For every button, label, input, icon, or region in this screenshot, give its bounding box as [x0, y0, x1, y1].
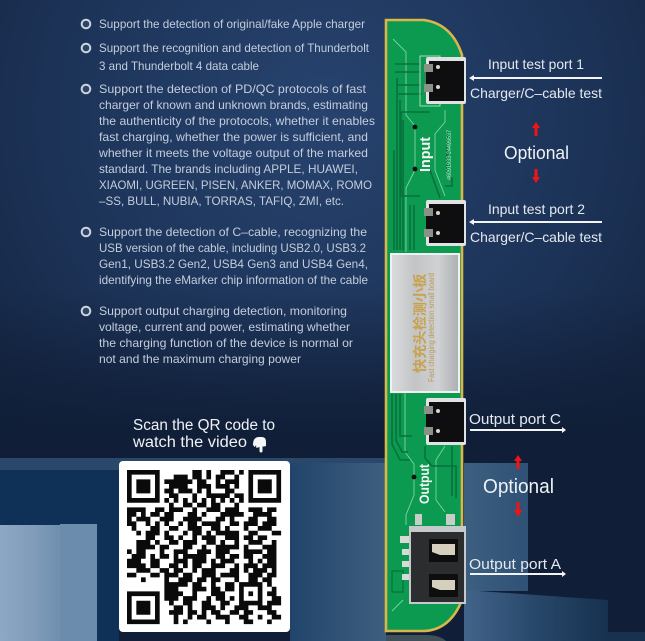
callout: input test port 2 [469, 201, 602, 245]
callout: input test port 2: Input test port 2 [488, 201, 585, 217]
feature: output charging detection: not and the maximum charging power [99, 352, 301, 366]
feature: Thunderbolt recognition: 3 and Thunderbolt 4 data cable [99, 59, 259, 73]
feature: PD/QC protocols: Support the detection of PD/QC protocols of fast [99, 82, 367, 96]
feature: PD/QC protocols: –SS, BULL, NUBIA, TORRAS, TAFIQ, ZMI, etc. [99, 194, 344, 208]
feature: PD/QC protocols: standard. The brands including APPLE, HUAWEI, [99, 162, 358, 176]
feature: PD/QC protocols [82, 82, 375, 208]
icon: pointing hand [253, 437, 266, 452]
feature: output charging detection [82, 304, 353, 366]
label: Output: Output [417, 464, 432, 504]
feature: output charging detection: the charging function of the device is normal or [99, 336, 353, 350]
feature: charger detection: Support the detection of original/fake Apple charger [99, 17, 365, 31]
PCB body with gold edge [386, 20, 462, 631]
USB-C port: output C [424, 398, 466, 445]
QR heading: Scan the QR code to [133, 417, 275, 434]
callout: output port A: Output port A [469, 557, 561, 573]
feature: Thunderbolt recognition [82, 41, 370, 73]
feature: PD/QC protocols: fast charging, whether the power is sufficient, and [99, 130, 368, 144]
feature: Thunderbolt recognition: Support the recognition and detection of Thunderbolt [99, 41, 370, 55]
metal shield with printed label: Fast charging detection small board [426, 273, 436, 382]
USB-C port: input 1 [420, 56, 466, 106]
feature: C-cable detection: identifying the eMarker chip information of the cable [99, 273, 368, 287]
arrow: red down [514, 502, 522, 517]
arrow: into port 1 [469, 75, 602, 81]
arrow: out of port C [470, 427, 566, 433]
USB-C port: input 2 [424, 200, 466, 246]
callout: input test port 2: Charger/C–cable test [470, 229, 602, 245]
feature: C-cable detection [82, 225, 368, 287]
QR heading [132, 417, 275, 452]
traces [392, 39, 456, 611]
feature: C-cable detection: Support the detection of C–cable, recognizing the [99, 225, 367, 239]
feature: C-cable detection: Gen1, USB3.2 Gen2, USB4 Gen3 and USB4 Gen4, [99, 257, 368, 271]
arrow: red up [514, 455, 522, 469]
feature: PD/QC protocols: whether it meets the voltage output of the marked [98, 146, 368, 160]
callout: output port C: Output port C [469, 412, 561, 428]
circuit board [386, 20, 466, 641]
feature: PD/QC protocols: the authenticity of the protocols, whether it enables [99, 114, 375, 128]
feature list [82, 17, 375, 366]
USB-A port [400, 514, 466, 604]
arrow: into port 2 [469, 219, 602, 225]
arrow: out of port A [470, 571, 566, 577]
feature: output charging detection: voltage, current and power, estimating whether [99, 320, 350, 334]
callout: output optional: Optional [483, 476, 554, 498]
callout: input test port 1: Input test port 1 [488, 56, 584, 72]
metal shield with printed label: 快充头检测小板 [412, 274, 429, 373]
callout: input test port 1: Charger/C–cable test [470, 85, 602, 101]
via dots [413, 125, 417, 129]
QR code [119, 461, 290, 632]
arrow: red up [532, 122, 540, 136]
feature: PD/QC protocols: XIAOMI, UGREEN, PISEN, ANKER, MOMAX, ROMO [99, 178, 372, 192]
feature: output charging detection: Support output charging detection, monitoring [99, 304, 347, 318]
board reflection [386, 635, 446, 641]
label: Input: Input [418, 137, 434, 172]
serial number: 46091933-24499537 [446, 130, 453, 180]
metal shield with printed label [390, 253, 460, 393]
callout: input optional: Optional [504, 143, 569, 163]
callout: output optional [483, 455, 554, 517]
feature: PD/QC protocols: charger of known and unknown brands, estimating [99, 98, 368, 112]
QR heading: watch the video [132, 434, 247, 451]
feature: C-cable detection: USB version of the cable, including USB2.0, USB3.2 [99, 241, 366, 255]
callout: output port C [469, 412, 566, 433]
callout: input test port 1 [469, 56, 602, 101]
arrow: red down [532, 169, 540, 183]
callout: input optional [504, 122, 569, 183]
